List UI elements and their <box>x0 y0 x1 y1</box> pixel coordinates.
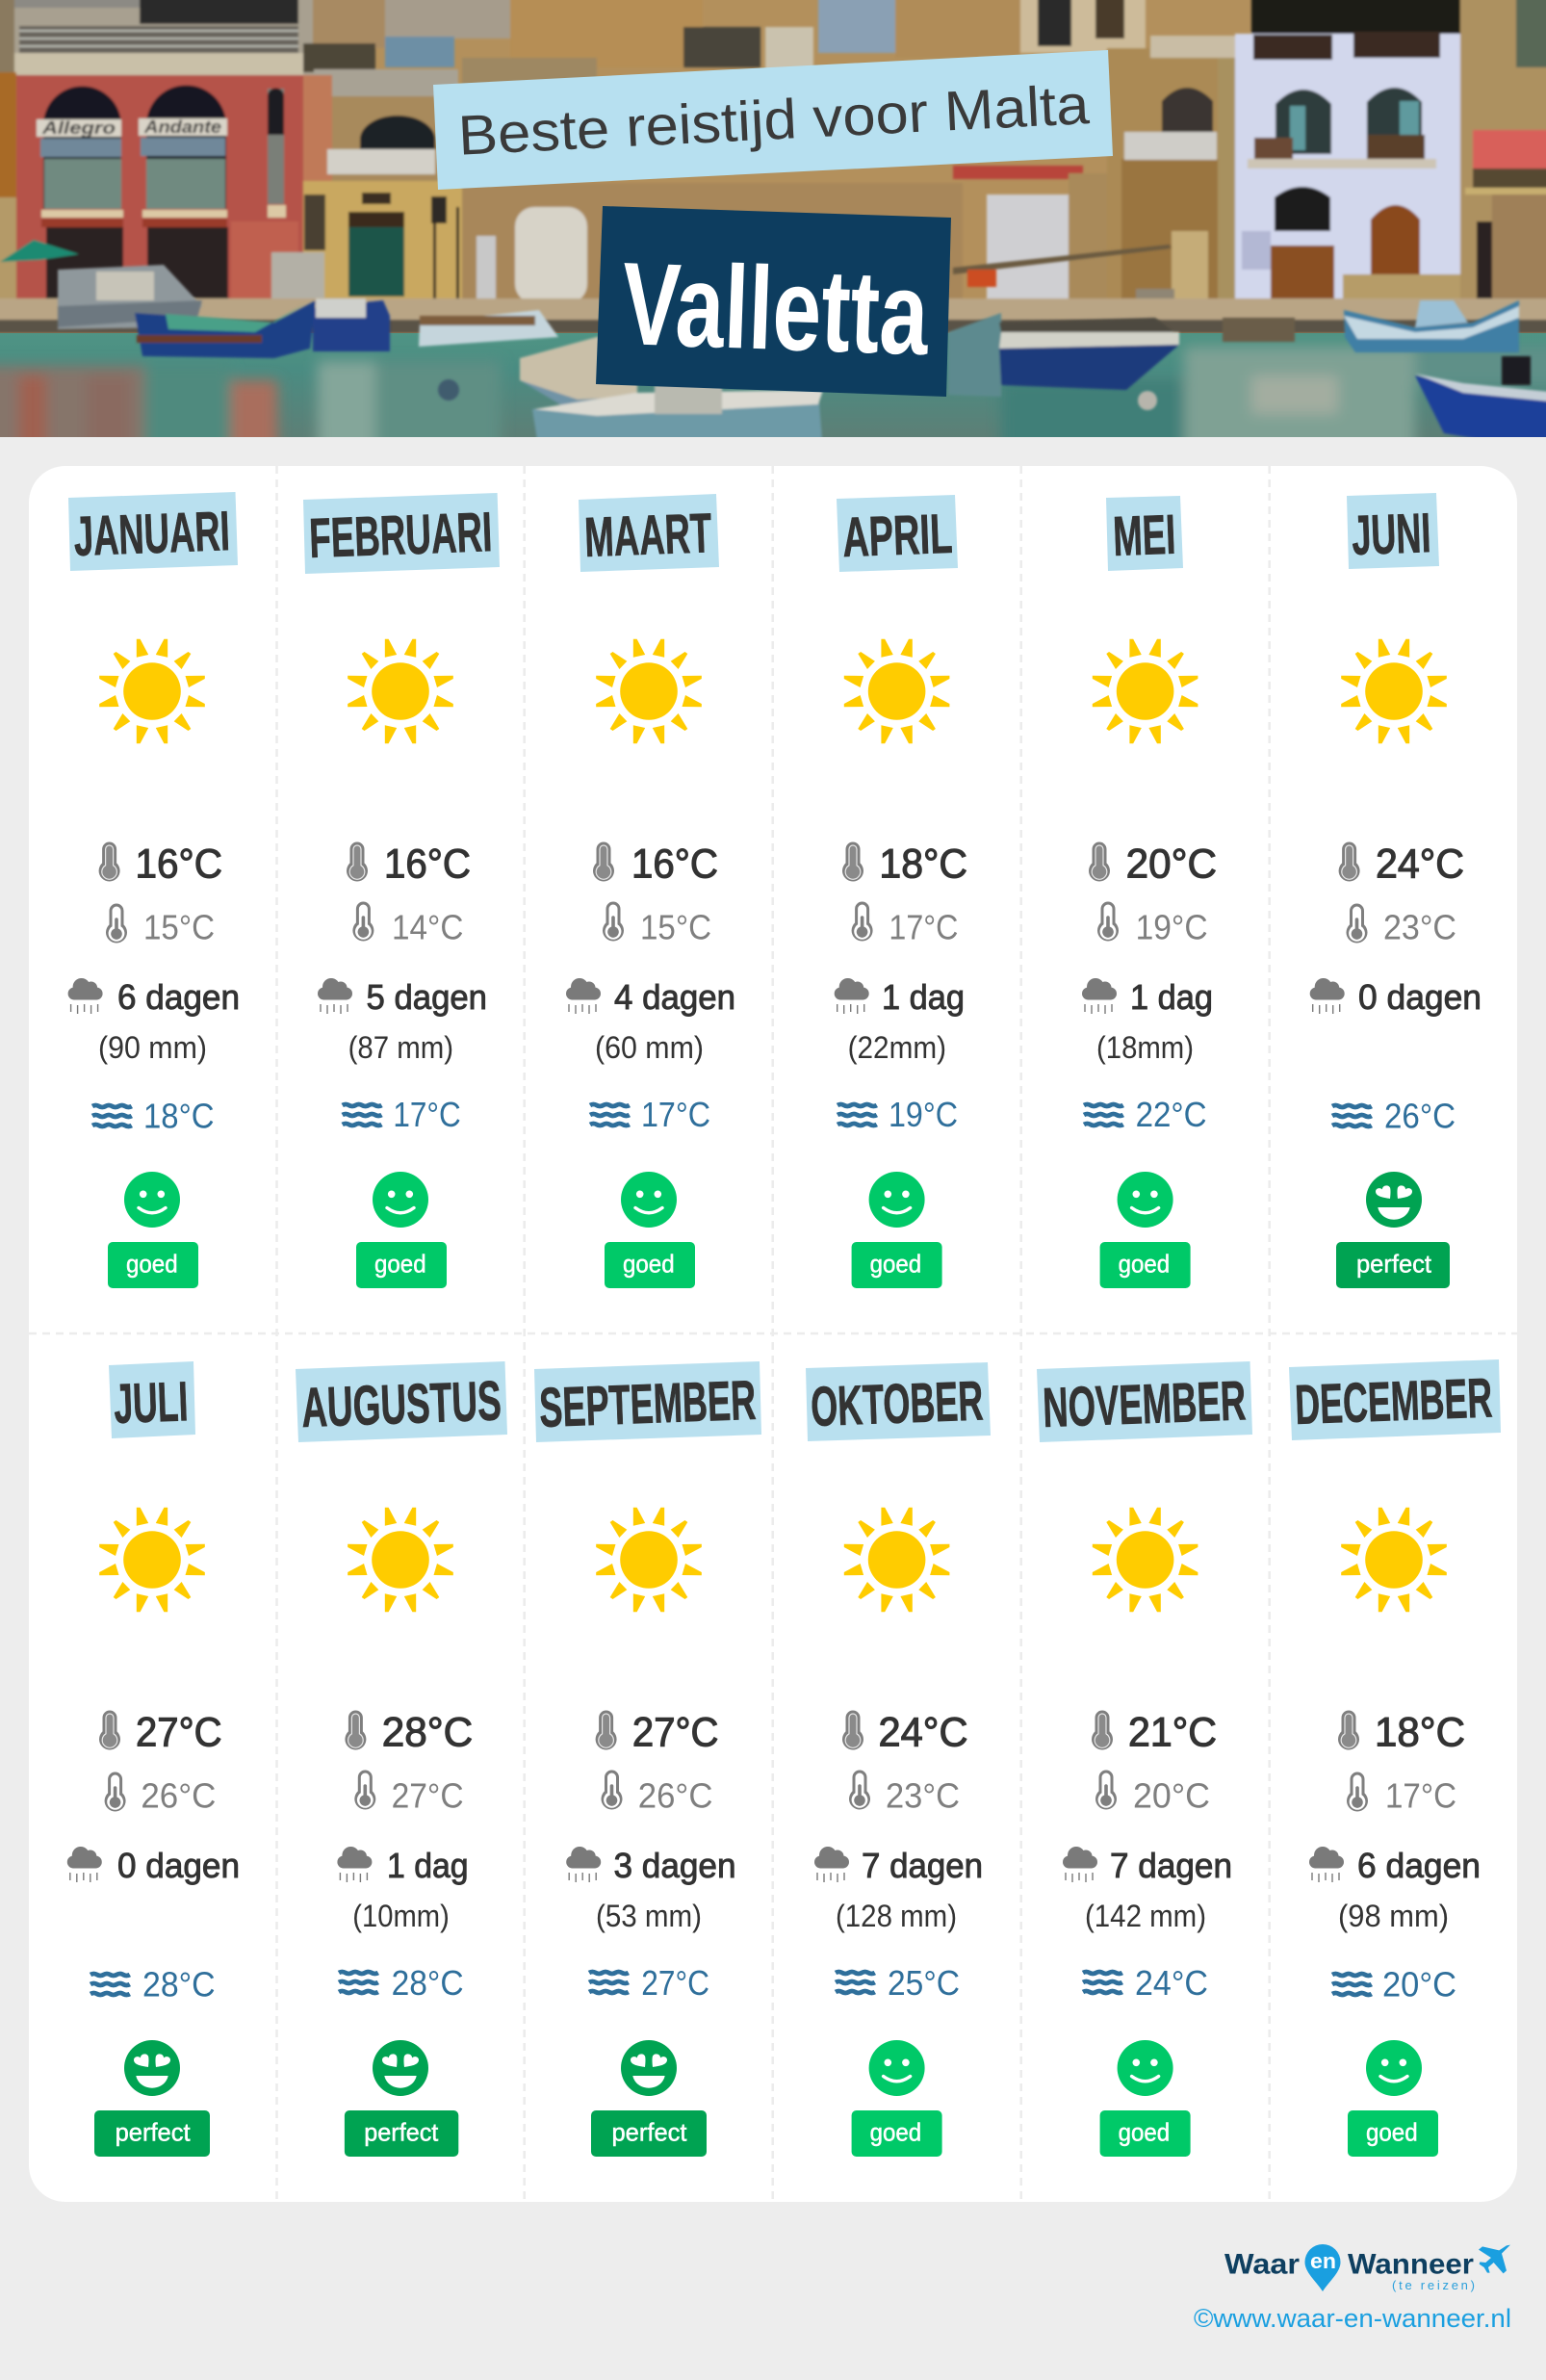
icon: sun <box>1093 639 1198 743</box>
high temperature: 21°C <box>1128 1710 1217 1756</box>
high temperature: 27°C <box>136 1710 222 1756</box>
logo: Waar en Wanneer: (te reizen) <box>1392 2278 1475 2292</box>
title banner <box>433 50 1113 190</box>
main card <box>29 466 1517 2202</box>
icon: smiley <box>1118 1172 1173 1228</box>
month label <box>68 492 238 571</box>
month label: MEI <box>1112 504 1176 568</box>
low temperature: 26°C <box>638 1776 712 1816</box>
rain days: 4 dagen <box>614 977 735 1017</box>
water temperature <box>1332 1964 1456 2004</box>
rating badge <box>356 1242 447 1288</box>
logo: Waar en Wanneer: Waar <box>1224 2249 1300 2281</box>
icon: smiley <box>1118 2040 1173 2096</box>
low temperature: 19°C <box>1136 908 1208 947</box>
rain days: 0 dagen <box>1358 977 1482 1017</box>
high temperature <box>842 841 967 888</box>
panel: januari <box>68 492 240 1288</box>
low temperature: 15°C <box>143 908 215 947</box>
high temperature: 16°C <box>631 841 718 888</box>
water temperature: 28°C <box>142 1964 216 2004</box>
high temperature <box>596 1710 718 1756</box>
rating badge <box>605 1242 695 1288</box>
month label: JANUARI <box>73 500 231 568</box>
water temperature: 19°C <box>889 1095 958 1134</box>
month label: JULI <box>113 1370 189 1436</box>
rainfall: (128 mm) <box>836 1899 957 1933</box>
month label <box>1347 493 1439 569</box>
header photo: Valletta harbour <box>0 0 1546 462</box>
water temperature <box>339 1963 464 2003</box>
water temperature: 17°C <box>393 1095 461 1134</box>
high temperature: 20°C <box>1126 841 1217 888</box>
icon: smiley <box>373 1172 428 1228</box>
low temperature: 15°C <box>640 908 711 947</box>
icon: love smiley <box>124 2040 180 2096</box>
panel: mei <box>1082 496 1217 1288</box>
month label <box>579 494 719 572</box>
low temperature <box>603 901 711 947</box>
water temperature: 20°C <box>1382 1964 1456 2004</box>
month label <box>1106 496 1183 571</box>
low temperature <box>1095 1770 1210 1816</box>
month label: FEBRUARI <box>308 501 493 570</box>
rating badge: perfect <box>364 2118 439 2147</box>
panel: november <box>1037 1361 1252 2157</box>
rain days: 3 dagen <box>614 1846 735 1885</box>
website credit: ©www.waar-en-wanneer.nl <box>1194 2304 1511 2333</box>
month label: SEPTEMBER <box>538 1369 757 1439</box>
icon: sun <box>348 639 453 743</box>
panel: oktober <box>806 1362 991 2157</box>
rainfall: (53 mm) <box>596 1899 702 1933</box>
rating badge: goed <box>374 1250 426 1279</box>
icon: smiley <box>869 2040 925 2096</box>
icon: sun <box>844 639 949 743</box>
low temperature <box>106 903 215 947</box>
high temperature: 27°C <box>632 1710 718 1756</box>
water temperature: 18°C <box>143 1097 214 1136</box>
rain days <box>67 1846 240 1885</box>
panel: juni <box>1310 493 1482 1288</box>
low temperature <box>849 1770 960 1816</box>
icon: sun <box>596 1508 702 1612</box>
low temperature <box>601 1770 712 1816</box>
header photo: Valletta harbour: Allegro <box>41 118 116 138</box>
high temperature: 24°C <box>878 1710 968 1756</box>
month label: APRIL <box>841 503 953 569</box>
month label <box>303 493 500 574</box>
low temperature <box>1347 1772 1456 1816</box>
water temperature <box>343 1095 461 1134</box>
rain days: 6 dagen <box>117 977 240 1017</box>
low temperature: 23°C <box>1383 908 1456 947</box>
month label <box>806 1362 991 1441</box>
panel: augustus <box>296 1361 507 2157</box>
water temperature <box>836 1963 960 2003</box>
month label: AUGUSTUS <box>300 1369 502 1439</box>
rating badge <box>1348 2110 1438 2157</box>
water temperature <box>92 1097 214 1136</box>
rain days: 7 dagen <box>1110 1846 1232 1885</box>
rating badge: goed <box>1119 1250 1170 1279</box>
water temperature: 28°C <box>392 1963 464 2003</box>
icon: sun <box>1341 639 1447 743</box>
month label <box>109 1361 195 1438</box>
water temperature <box>590 1095 710 1134</box>
panel: februari <box>303 493 500 1288</box>
panel: december <box>1289 1359 1501 2157</box>
high temperature: 24°C <box>1376 841 1464 888</box>
rating badge: goed <box>870 2118 921 2147</box>
water temperature: 22°C <box>1136 1095 1207 1134</box>
water temperature <box>589 1963 709 2003</box>
water temperature <box>1084 1095 1207 1134</box>
month label <box>837 495 958 572</box>
water temperature: 26°C <box>1384 1097 1456 1136</box>
icon: airplane <box>1479 2245 1510 2273</box>
water temperature: 25°C <box>888 1963 960 2003</box>
rain days: 1 dag <box>1130 977 1213 1017</box>
rating badge: perfect <box>1356 1250 1432 1279</box>
rain days <box>68 977 240 1017</box>
icon: love smiley <box>621 2040 677 2096</box>
high temperature: 28°C <box>382 1710 473 1756</box>
low temperature <box>852 901 958 947</box>
month label <box>534 1361 761 1442</box>
rain days: 7 dagen <box>862 1846 983 1885</box>
rating badge <box>1100 2110 1191 2157</box>
rating badge: goed <box>623 1250 675 1279</box>
rating badge <box>108 1242 198 1288</box>
rating badge: perfect <box>116 2118 191 2147</box>
icon: smiley <box>1366 2040 1422 2096</box>
month label <box>1037 1361 1252 1442</box>
rating badge <box>591 2110 707 2157</box>
rain days <box>318 977 487 1017</box>
rating badge: goed <box>870 1250 921 1279</box>
rain days: 5 dagen <box>366 977 487 1017</box>
rating badge <box>94 2110 210 2157</box>
month label: JUNI <box>1351 502 1431 567</box>
rating badge: goed <box>1366 2118 1418 2147</box>
low temperature <box>105 1772 216 1816</box>
panel: september <box>534 1361 761 2157</box>
logo: Waar en Wanneer: Wanneer <box>1348 2249 1474 2281</box>
icon: love smiley <box>1366 1172 1422 1228</box>
water temperature <box>837 1095 958 1134</box>
rating badge <box>852 1242 942 1288</box>
rainfall: (60 mm) <box>595 1030 704 1065</box>
water temperature: 24°C <box>1135 1963 1208 2003</box>
high temperature: 18°C <box>879 841 967 888</box>
high temperature: 16°C <box>384 841 471 888</box>
rainfall: (10mm) <box>352 1899 450 1933</box>
high temperature <box>347 841 471 888</box>
high temperature <box>99 1710 222 1756</box>
icon: sun <box>596 639 702 743</box>
rain days <box>337 1846 469 1885</box>
water temperature: 27°C <box>641 1963 709 2003</box>
rainfall: (98 mm) <box>1338 1899 1449 1933</box>
water temperature <box>1332 1097 1456 1136</box>
water temperature <box>90 1964 216 2004</box>
high temperature <box>1339 841 1464 888</box>
low temperature <box>1346 903 1456 947</box>
icon: sun <box>348 1508 453 1612</box>
high temperature <box>99 841 222 888</box>
month label <box>296 1361 507 1442</box>
low temperature <box>1097 901 1208 947</box>
rainfall: (142 mm) <box>1085 1899 1206 1933</box>
high temperature: 16°C <box>135 841 222 888</box>
rating badge: goed <box>1119 2118 1170 2147</box>
rain days: 1 dag <box>882 977 965 1017</box>
water temperature <box>1083 1963 1208 2003</box>
rating badge <box>1100 1242 1191 1288</box>
icon: smiley <box>124 1172 180 1228</box>
icon: map pin <box>1305 2244 1340 2291</box>
icon: sun <box>99 1508 205 1612</box>
rain days: 0 dagen <box>117 1846 240 1885</box>
high temperature: 18°C <box>1375 1710 1465 1756</box>
rain days <box>566 977 735 1017</box>
rating badge: perfect <box>612 2118 687 2147</box>
rating badge: goed <box>126 1250 178 1279</box>
icon: sun <box>1093 1508 1198 1612</box>
rainfall: (87 mm) <box>348 1030 453 1065</box>
low temperature: 26°C <box>141 1776 216 1816</box>
low temperature: 27°C <box>392 1776 464 1816</box>
logo: Waar en Wanneer <box>1224 2244 1510 2292</box>
rain days: 1 dag <box>387 1846 469 1885</box>
rating badge <box>1336 1242 1450 1288</box>
water temperature: 17°C <box>641 1095 710 1134</box>
rain days <box>835 977 965 1017</box>
icon: sun <box>1341 1508 1447 1612</box>
rainfall: (22mm) <box>848 1030 946 1065</box>
low temperature <box>354 1770 464 1816</box>
low temperature: 23°C <box>886 1776 960 1816</box>
icon: map pin: en <box>1310 2249 1336 2273</box>
rating badge <box>852 2110 942 2157</box>
low temperature <box>352 901 463 947</box>
low temperature: 17°C <box>889 908 958 947</box>
high temperature <box>842 1710 968 1756</box>
panel: juli <box>67 1361 240 2157</box>
rain days <box>1082 977 1213 1017</box>
city banner: Valletta: Valletta <box>620 238 931 379</box>
icon: love smiley <box>373 2040 428 2096</box>
panel: maart <box>566 494 735 1288</box>
month label: NOVEMBER <box>1042 1369 1247 1439</box>
rainfall: (18mm) <box>1096 1030 1194 1065</box>
month label: OKTOBER <box>810 1369 984 1438</box>
title banner: Beste reistijd voor Malta <box>456 73 1092 168</box>
high temperature <box>593 841 718 888</box>
icon: smiley <box>621 1172 677 1228</box>
high temperature <box>1092 1710 1217 1756</box>
icon: sun <box>844 1508 949 1612</box>
low temperature: 14°C <box>392 908 463 947</box>
icon: sun <box>99 639 205 743</box>
rating badge <box>345 2110 458 2157</box>
low temperature: 17°C <box>1385 1776 1456 1816</box>
icon: smiley <box>869 1172 925 1228</box>
city banner: Valletta <box>596 206 951 397</box>
low temperature: 20°C <box>1133 1776 1210 1816</box>
rain days: 6 dagen <box>1357 1846 1481 1885</box>
header photo: Valletta harbour: Andante <box>143 117 221 137</box>
month label: MAART <box>583 502 712 569</box>
rainfall: (90 mm) <box>98 1030 207 1065</box>
panel: april <box>835 495 967 1288</box>
